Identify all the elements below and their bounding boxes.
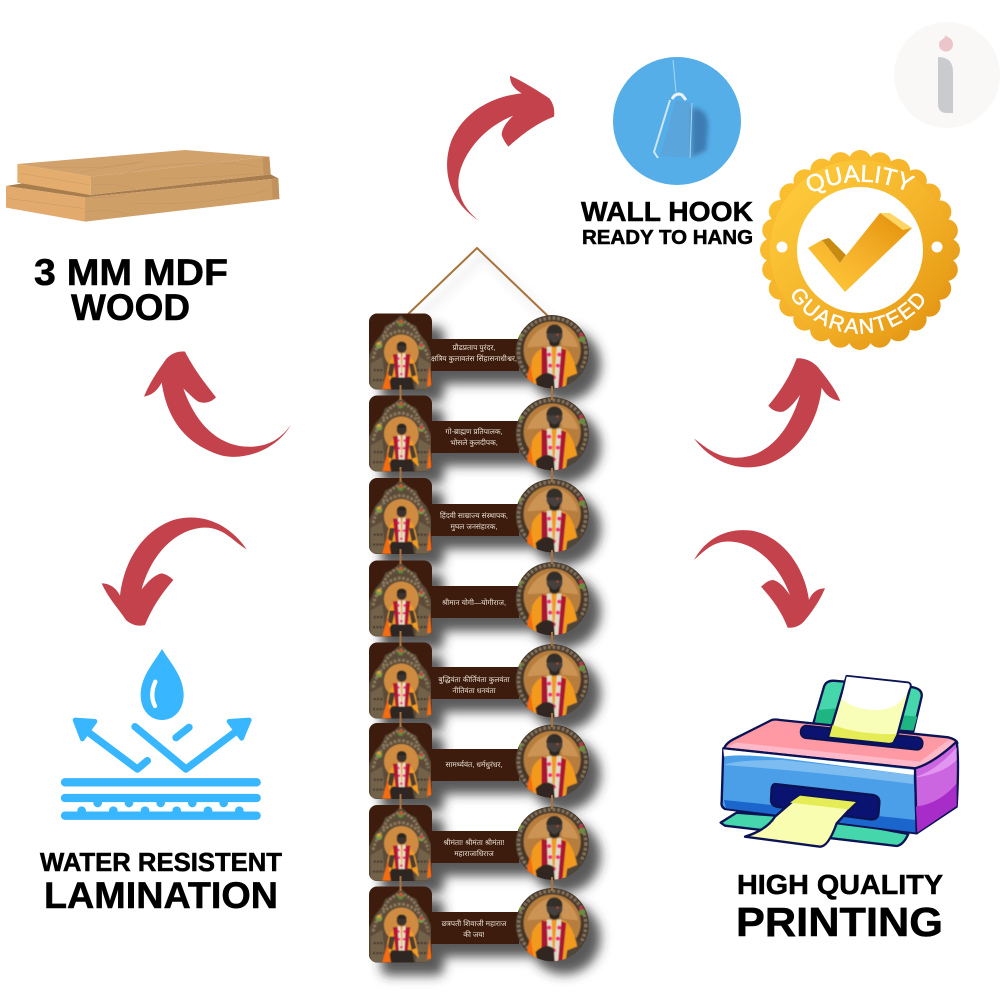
product: panel 5 bbox=[369, 631, 589, 719]
heading: wall hook bbox=[581, 196, 753, 249]
product: panel 5: नीतिवंता धनवंता bbox=[452, 686, 497, 695]
icon: wood planks bbox=[6, 150, 279, 222]
product: panel 6: सामर्थ्यवंत, धर्मधुरंधर, bbox=[445, 760, 503, 770]
product: panel 6 bbox=[369, 712, 589, 799]
product: panel 7 bbox=[369, 794, 589, 881]
arrow: to wood bbox=[144, 351, 291, 457]
product: panel 7: श्रीमंता! श्रीमंता श्रीमंता! bbox=[443, 838, 505, 847]
product: panel 1 bbox=[369, 314, 589, 390]
heading: 3 mm mdf wood bbox=[34, 252, 228, 328]
arrow: to printing bbox=[694, 530, 825, 628]
heading: high quality printing bbox=[736, 869, 943, 945]
product: panel 2: गो-ब्राह्मण प्रतिपालक, bbox=[445, 427, 503, 436]
product: panel 4: श्रीमान योगी—योगीराज, bbox=[442, 598, 506, 607]
product: panel 1: प्रौढप्रताप पुरंदर, bbox=[452, 343, 496, 353]
heading: water resistent lamination: WATER RESISTENT bbox=[40, 847, 282, 877]
product: panel 7: महाराजाधिराज bbox=[454, 849, 494, 858]
icon: water resistant bbox=[65, 649, 257, 816]
heading: high quality printing: HIGH QUALITY bbox=[737, 869, 943, 900]
heading: water resistent lamination bbox=[40, 847, 282, 916]
product: panel 8: की जय! bbox=[463, 930, 485, 939]
heading: wall hook: WALL HOOK bbox=[581, 196, 753, 227]
arrow: to wall hook bbox=[447, 76, 554, 221]
badge: quality guaranteed: QUALITY bbox=[806, 164, 916, 194]
watermark logo bbox=[894, 22, 1000, 128]
icon: printer bbox=[721, 676, 958, 847]
product: panel 2: भोसले कुलदीपक, bbox=[450, 438, 498, 448]
product: panel 1: क्षत्रिय कुलावतंस सिंहासनाधीश्वर, bbox=[431, 354, 517, 364]
heading: 3 mm mdf wood: 3 MM MDF bbox=[34, 252, 228, 293]
product: panel 2 bbox=[369, 385, 589, 472]
badge: quality guaranteed: GUARANTEED bbox=[792, 288, 924, 334]
arrow: to quality badge bbox=[694, 358, 840, 467]
icon: wall hook bbox=[613, 57, 741, 185]
hanging rope bbox=[404, 248, 552, 320]
product: panel 3 bbox=[369, 467, 589, 554]
product: panel 8: छत्रपती शिवाजी महाराज bbox=[442, 919, 507, 928]
product: panel 8 bbox=[369, 876, 589, 963]
product: panel 4 bbox=[369, 549, 589, 637]
heading: water resistent lamination: LAMINATION bbox=[44, 875, 278, 916]
heading: 3 mm mdf wood: WOOD bbox=[71, 287, 190, 328]
heading: wall hook: READY TO HANG bbox=[582, 226, 753, 249]
product: panel 3: हिंदवी साम्राज्य संस्थापक, bbox=[440, 511, 508, 520]
heading: high quality printing: PRINTING bbox=[736, 899, 943, 945]
product: panel 5: बुद्धिवंता कीर्तिवंता कुलवंता bbox=[438, 675, 511, 685]
badge: quality guaranteed bbox=[760, 150, 960, 350]
product: panel 3: मुघल जनसंहारक, bbox=[450, 522, 498, 532]
arrow: to lamination bbox=[102, 518, 247, 626]
